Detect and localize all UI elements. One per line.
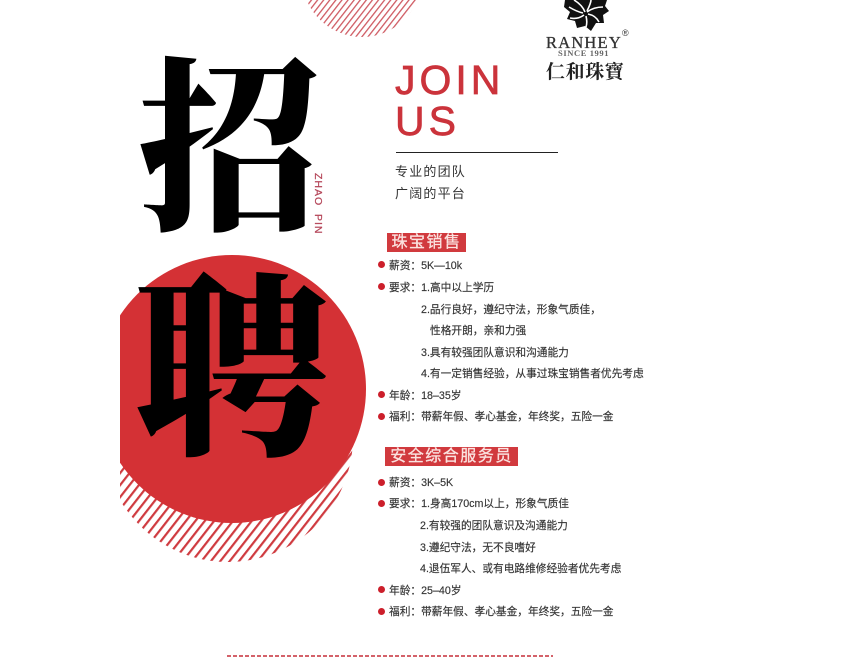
- requirement 2 continued: 性格开朗，亲和力强: [430, 325, 526, 337]
- registered mark: ®: [622, 28, 629, 38]
- bullet: [378, 608, 385, 615]
- requirement 1: 要求：1.身高170cm以上，形象气质佳: [389, 498, 569, 510]
- benefits: 福利：带薪年假、孝心基金，年终奖，五险一金: [389, 606, 613, 618]
- logo chinese: 仁和珠寶: [546, 57, 624, 84]
- bullet: [378, 413, 385, 420]
- requirement 2: 2.有较强的团队意识及沟通能力: [420, 520, 568, 532]
- title: JOIN US: US: [395, 98, 460, 144]
- red circle: [98, 255, 366, 523]
- logo wordmark: RANHEY: [546, 33, 622, 52]
- bullet: [378, 391, 385, 398]
- bullet: [378, 283, 385, 290]
- section tag: 珠宝销售: 珠宝销售: [391, 234, 462, 251]
- requirement 4: 4.退伍军人、或有电路维修经验者优先考虑: [420, 563, 621, 575]
- slogan: 广阔的平台: [395, 186, 466, 201]
- dashed line: [227, 655, 553, 656]
- slogan: 专业的团队: [395, 164, 466, 179]
- icon: swirl emblem: [564, 0, 609, 31]
- striped circle: bottom: [120, 450, 352, 562]
- heading character: 招: 招: [138, 2, 320, 269]
- vertical label: ZHAO PIN: ZHAO PIN: [312, 173, 324, 235]
- age: 年龄：18–35岁: [389, 390, 461, 402]
- logo: RANHEY: [546, 0, 629, 84]
- bullet: [378, 261, 385, 268]
- slogan: [395, 164, 466, 201]
- salary: 薪资：3K–5K: [389, 477, 453, 489]
- section 1 details: [378, 260, 644, 423]
- requirement 1: 要求：1.高中以上学历: [389, 282, 494, 294]
- requirement 3: 3.遵纪守法，无不良嗜好: [420, 542, 536, 554]
- title: JOIN US: [395, 57, 504, 144]
- section tag: 安全综合服务员: 安全综合服务员: [390, 448, 513, 465]
- bullet: [378, 500, 385, 507]
- decorative circles with stripes: [120, 0, 416, 562]
- divider: [396, 152, 558, 153]
- requirement 2: 2.品行良好，遵纪守法，形象气质佳，: [421, 304, 601, 316]
- requirement 3: 3.具有较强团队意识和沟通能力: [421, 347, 569, 359]
- title: JOIN US: JOIN: [395, 57, 504, 103]
- benefits: 福利：带薪年假、孝心基金，年终奖，五险一金: [389, 411, 613, 423]
- bullet: [378, 586, 385, 593]
- heading character: 聘: 聘: [134, 214, 330, 496]
- requirement 4: 4.有一定销售经验，从事过珠宝销售者优先考虑: [421, 368, 644, 380]
- section 2 details: [378, 476, 621, 618]
- striped circle: top: [302, 0, 422, 37]
- age: 年龄：25–40岁: [389, 585, 461, 597]
- bullet: [378, 479, 385, 486]
- salary: 薪资：5K—10k: [389, 260, 462, 272]
- logo since: SINCE 1991: [558, 48, 609, 58]
